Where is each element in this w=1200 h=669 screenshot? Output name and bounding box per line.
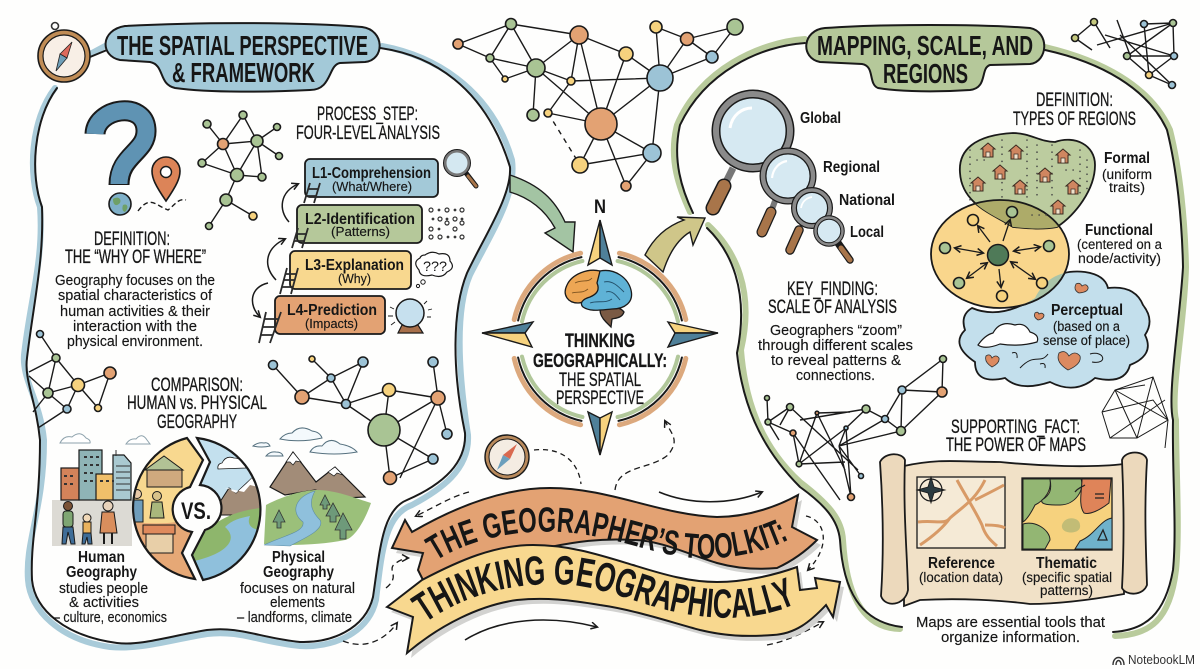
text: key finding [758, 279, 913, 384]
text: definition why of where: human activities & their [60, 303, 210, 320]
label: vs: VS. [181, 498, 211, 525]
level 1 box [305, 159, 438, 197]
heading: comparison: HUMAN vs. PHYSICAL [127, 393, 267, 414]
text: map captions: Reference [928, 555, 995, 572]
heading: comparison [127, 375, 267, 433]
text: map captions: patterns) [1040, 583, 1093, 598]
text: human geography: Human [78, 549, 125, 566]
text: physical geography: Physical [272, 549, 325, 566]
text: key finding: Geographers “zoom” [770, 322, 902, 339]
region: perceptual cloud [959, 272, 1150, 388]
text: map captions: Thematic [1036, 555, 1097, 572]
text: map captions [919, 555, 1112, 598]
map: thematic [1022, 478, 1112, 550]
icon: compass top left [38, 22, 90, 82]
network: lower centre right [764, 356, 947, 500]
scale labels: Local [850, 224, 884, 241]
banner: thinking geographically: THINKING GEOGRAPHICALLY [410, 556, 790, 620]
level 3 box: (Why) [338, 271, 371, 286]
icon: thought bubble [416, 252, 452, 288]
labels: formal and functional: node/activity) [1078, 251, 1161, 266]
dashed connectors [343, 421, 823, 645]
network: centre left [268, 356, 452, 484]
text: physical geography: Geography [263, 564, 334, 581]
icon: small compass [485, 435, 529, 479]
text: central title: THE SPATIAL [559, 370, 641, 391]
icon: question mark [95, 111, 146, 185]
text: maps caption [916, 614, 1106, 646]
text: physical geography: – landforms, climate [237, 609, 352, 626]
text: key finding: connections. [796, 367, 875, 384]
logo: NotebookLM: NotebookLM [1128, 653, 1195, 667]
magnifier: regional [762, 151, 813, 232]
icon: globe [109, 193, 131, 215]
banner: geographer's toolkit: THE GEOGRAPHER’S TOOLKIT: [424, 507, 788, 559]
heading: comparison: COMPARISON: [151, 375, 243, 396]
icon: location pin [152, 157, 180, 201]
level 2 box [297, 205, 422, 243]
scale labels: Global [800, 110, 841, 127]
label: north: N [594, 197, 606, 218]
text: maps caption: Maps are essential tools that [916, 614, 1106, 631]
scale labels: Regional [823, 159, 880, 176]
level 1 box: (What/Where) [332, 179, 412, 194]
arrow: green into centre [510, 175, 575, 252]
text: central title: GEOGRAPHICALLY: [533, 351, 667, 372]
map: reference [917, 477, 1005, 548]
heading: process step: FOUR-LEVEL ANALYSIS [296, 123, 440, 144]
dashed trail [138, 200, 186, 211]
wireframe sketch [1102, 377, 1168, 448]
labels: formal and functional [1077, 150, 1162, 266]
heading: mapping scale and regions [806, 25, 1044, 91]
heading: power of maps: SUPPORTING_FACT: [951, 417, 1080, 438]
text: definition why of where: DEFINITION: [94, 229, 170, 250]
text: map captions: (location data) [919, 570, 1003, 585]
text: human geography [53, 549, 167, 626]
text: key finding: through different scales [758, 337, 913, 354]
labels: formal and functional: Functional [1085, 222, 1153, 239]
functional node diagram [940, 206, 1054, 302]
region: perceptual cloud: sense of place) [1043, 333, 1130, 348]
magnifier: national [790, 190, 830, 250]
region: perceptual cloud: Perceptual [1051, 302, 1123, 319]
level 2 box: (Patterns) [331, 224, 390, 239]
illustration: versus circle [132, 436, 262, 582]
network: top right [1072, 18, 1178, 88]
text: central title: PERSPECTIVE [556, 388, 644, 409]
heading: mapping scale and regions: REGIONS [883, 58, 968, 89]
network: top centre [453, 18, 743, 191]
level 2 box: L2-Identification [305, 211, 415, 228]
heading: spatial perspective [106, 23, 380, 92]
text: physical geography [237, 549, 355, 626]
heading: mapping scale and regions: MAPPING, SCALE, AND [817, 30, 1033, 61]
illustration: parchment scroll [880, 452, 1147, 606]
heading: process step [296, 104, 440, 144]
region: perceptual cloud: (based on a [1053, 319, 1120, 334]
level 3 box [290, 251, 411, 289]
level 4 box: (Impacts) [305, 316, 358, 331]
text: human geography: – culture, economics [53, 609, 167, 626]
icon: ladders [259, 183, 320, 343]
network: lower left [29, 330, 116, 428]
scale labels [800, 110, 895, 241]
network: upper left [198, 111, 282, 230]
heading: types of regions: TYPES OF REGIONS [1013, 109, 1136, 130]
level 1 box: L1-Comprehension [312, 165, 431, 182]
icon: pattern dots [429, 208, 464, 239]
central compass ring [514, 253, 686, 425]
text: definition why of where: interaction with the [73, 318, 197, 335]
region: formal [958, 132, 1096, 230]
text: key finding: KEY_FINDING: [787, 279, 878, 300]
text: map captions: (specific spatial [1022, 570, 1112, 585]
panel: mapping scale and regions frame [674, 39, 1186, 636]
text: human geography: Geography [66, 564, 137, 581]
text: key finding: SCALE OF ANALYSIS [768, 297, 897, 318]
text: key finding: to reveal patterns & [771, 352, 901, 369]
labels: formal and functional: (uniform [1102, 167, 1152, 182]
labels: formal and functional: traits) [1109, 180, 1145, 195]
heading: types of regions: DEFINITION: [1036, 90, 1113, 111]
icon: crystal ball [388, 299, 432, 333]
region: functional [931, 200, 1069, 308]
text: physical geography: elements [270, 594, 325, 611]
heading: process step: PROCESS_STEP: [317, 104, 418, 125]
heading: types of regions [1013, 90, 1136, 130]
compass star points [482, 220, 718, 455]
banner: thinking geographically [385, 544, 844, 658]
panel: spatial perspective frame [24, 46, 513, 648]
text: definition why of where [55, 229, 215, 350]
people [62, 501, 117, 544]
icon: brain [565, 270, 632, 327]
text: definition why of where: THE “WHY OF WHERE” [65, 247, 206, 268]
level 4 box: L4-Prediction [287, 302, 377, 319]
icon: global to local magnifiers [713, 94, 850, 260]
heading: spatial perspective: & FRAMEWORK [172, 57, 315, 88]
text: physical geography: focuses on natural [240, 580, 355, 597]
illustration: human geography city [52, 434, 150, 546]
heading: comparison: GEOGRAPHY [157, 412, 237, 433]
magnifier: global [713, 94, 790, 208]
text: maps caption: organize information. [941, 629, 1080, 646]
text: central title [533, 331, 667, 409]
text: human geography: studies people [59, 580, 148, 597]
banner: geographer's toolkit [390, 487, 821, 580]
arrows between levels [252, 184, 298, 317]
heading: power of maps: THE POWER OF MAPS [946, 435, 1086, 456]
scale labels: National [839, 192, 895, 209]
arrow: olive out of centre [645, 217, 705, 272]
text: definition why of where: spatial characteristics of [58, 287, 213, 304]
text: definition why of where: physical environment. [67, 333, 203, 350]
icon: small magnifier [444, 150, 476, 186]
text: human geography: & activities [69, 594, 139, 611]
heading: power of maps [946, 417, 1086, 456]
illustration: physical geography landscape [253, 428, 371, 546]
heading: spatial perspective: THE SPATIAL PERSPECTIVE [117, 30, 368, 61]
labels: formal and functional: (centered on a [1077, 237, 1162, 252]
magnifier: local [816, 218, 850, 260]
text: definition why of where: Geography focuses on the [55, 272, 215, 289]
labels: formal and functional: Formal [1104, 150, 1150, 167]
text: central title: THINKING [565, 331, 635, 352]
level 4 box [275, 296, 385, 334]
level 3 box: L3-Explanation [305, 257, 404, 274]
icon: thought bubble: ??? [423, 258, 447, 274]
